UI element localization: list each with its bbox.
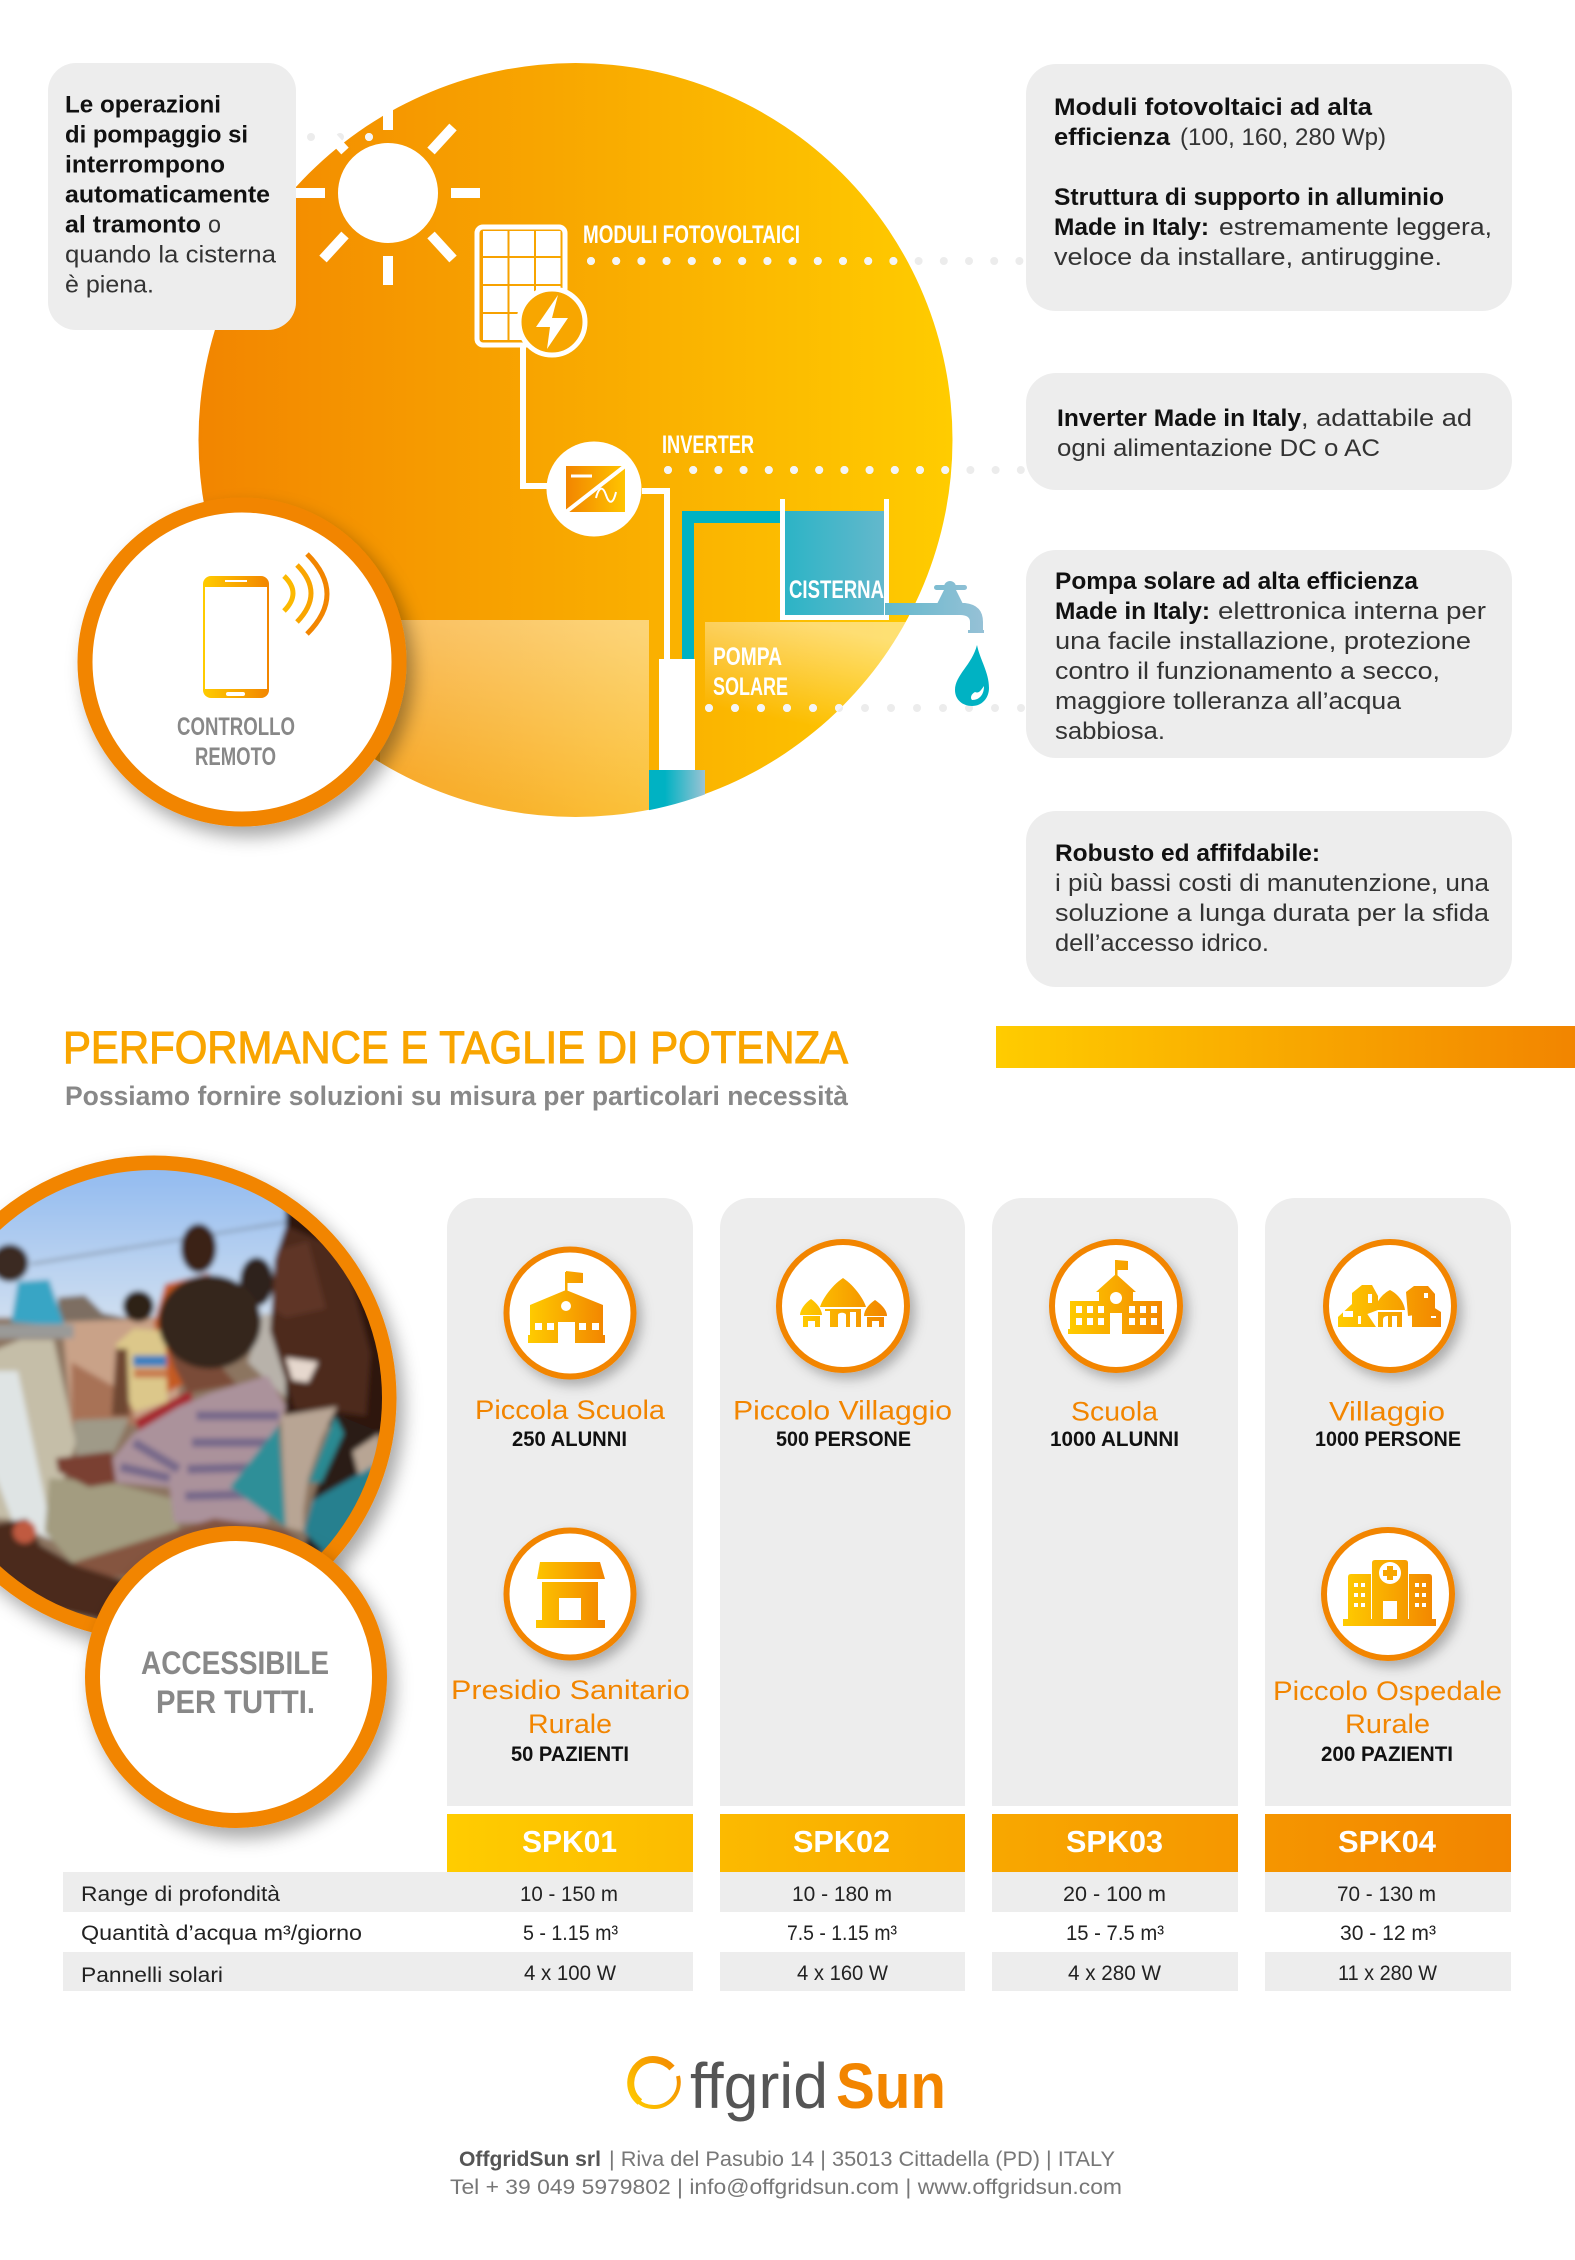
footer contact text: | Riva del Pasubio 14 | 35013 Cittadella (PD) | ITALY	[609, 2148, 1115, 2171]
remote control label: CONTROLLO	[177, 713, 295, 741]
specification table: 4 x 280 W	[1068, 1962, 1161, 1985]
diagram labels: MODULI FOTOVOLTAICI	[583, 221, 800, 249]
panel: pompa solare: elettronica interna per	[1218, 598, 1486, 625]
sun disc background	[198, 63, 952, 817]
remote control label: REMOTO	[195, 743, 276, 771]
panel: moduli fotovoltaici: Made in Italy:	[1054, 214, 1209, 241]
panel: pompa solare: maggiore tolleranza all’acqua	[1055, 688, 1402, 715]
specification table: 30 - 12 m³	[1340, 1922, 1436, 1945]
diagram labels: CISTERNA	[789, 576, 884, 604]
specification table: Pannelli solari	[81, 1964, 223, 1987]
label: piccolo villaggio: 500 PERSONE	[776, 1428, 911, 1451]
label: presidio sanitario: Rurale	[528, 1709, 612, 1739]
panel: moduli fotovoltaici: veloce da installare, antiruggine.	[1054, 244, 1442, 271]
callout: stop operations: o	[208, 212, 221, 238]
icon: solar panel	[477, 227, 585, 355]
callout: stop operations: al tramonto	[65, 212, 201, 238]
footer contact text: Tel + 39 049 5979802 | info@offgridsun.com | www.offgridsun.com	[450, 2176, 1122, 2199]
icon: inverter	[546, 442, 642, 536]
specification table: 4 x 160 W	[797, 1962, 888, 1985]
panel: moduli fotovoltaici: Moduli fotovoltaici ad alta	[1054, 94, 1373, 121]
panel: moduli fotovoltaici: Struttura di supporto in alluminio	[1054, 184, 1444, 211]
specification table: 4 x 100 W	[524, 1962, 616, 1985]
diagram labels: INVERTER	[662, 431, 754, 459]
callout circle: accessibile per tutti	[92, 1534, 380, 1820]
panel: robusto	[1026, 811, 1512, 987]
panel: robusto: dell’accesso idrico.	[1055, 930, 1269, 957]
logo: Sun	[836, 2050, 946, 2122]
panel: pompa solare: Made in Italy:	[1055, 598, 1210, 625]
callout: stop operations: automaticamente	[65, 182, 270, 208]
label: presidio sanitario: Presidio Sanitario	[451, 1675, 690, 1705]
panel: pompa solare: sabbiosa.	[1055, 718, 1165, 745]
column 4: SPK04	[1265, 1198, 1511, 1806]
specification table: Quantità d’acqua m³/giorno	[81, 1922, 362, 1945]
panel: moduli fotovoltaici: efficienza	[1054, 124, 1171, 151]
dotted leader: grey outside circle	[311, 137, 1024, 708]
callout circle: accessibile per tutti: ACCESSIBILE	[141, 1645, 329, 1681]
panel: moduli fotovoltaici	[1026, 64, 1512, 311]
model header bars: SPK02	[793, 1824, 890, 1859]
icon: health post	[506, 1530, 634, 1658]
specification table: 20 - 100 m	[1063, 1883, 1166, 1906]
panel: inverter	[1026, 373, 1512, 490]
label: villaggio	[1315, 1396, 1461, 1451]
panel: pompa solare: Pompa solare ad alta efficienza	[1055, 568, 1419, 595]
label: piccolo ospedale: 200 PAZIENTI	[1321, 1743, 1453, 1766]
icon: school	[1052, 1242, 1180, 1370]
label: piccolo villaggio	[733, 1396, 952, 1451]
label: scuola: 1000 ALUNNI	[1050, 1428, 1179, 1451]
label: piccolo ospedale: Piccolo Ospedale	[1273, 1676, 1502, 1706]
callout: stop operations: è piena.	[65, 272, 154, 298]
column 1: SPK01	[447, 1198, 693, 1806]
remote control label	[177, 713, 295, 771]
label: piccolo ospedale	[1273, 1676, 1502, 1766]
label: villaggio: 1000 PERSONE	[1315, 1428, 1461, 1451]
soil layers	[380, 620, 906, 817]
footer contact text	[450, 2148, 1122, 2199]
diagram labels: POMPA	[713, 643, 782, 671]
icon: water drop	[955, 645, 989, 706]
heading	[63, 1022, 849, 1111]
callout circle: accessibile per tutti: PER TUTTI.	[156, 1684, 315, 1720]
label: presidio sanitario	[451, 1675, 690, 1766]
icon: small school	[506, 1250, 634, 1376]
icon: sun	[296, 101, 480, 285]
callout: stop operations: interrompono	[65, 152, 225, 178]
panel: pompa solare	[1026, 550, 1512, 758]
label: villaggio: Villaggio	[1329, 1396, 1445, 1426]
panel: robusto: Robusto ed affifdabile:	[1055, 840, 1320, 867]
specification table: 15 - 7.5 m³	[1066, 1922, 1164, 1945]
specification table: 5 - 1.15 m³	[523, 1922, 618, 1945]
model header bars: SPK04	[1338, 1824, 1437, 1859]
specification table: 11 x 280 W	[1338, 1962, 1437, 1985]
panel: moduli fotovoltaici: estremamente leggera,	[1219, 214, 1492, 241]
label: scuola	[1050, 1396, 1179, 1451]
panel: moduli fotovoltaici: (100, 160, 280 Wp)	[1180, 124, 1386, 151]
heading accent bar	[996, 1026, 1575, 1068]
panel: pompa solare: una facile installazione, protezione	[1055, 628, 1471, 655]
label: presidio sanitario: 50 PAZIENTI	[511, 1743, 629, 1766]
panel: pompa solare: contro il funzionamento a secco,	[1055, 658, 1440, 685]
heading: PERFORMANCE E TAGLIE DI POTENZA	[63, 1022, 848, 1073]
panel: inverter: ogni alimentazione DC o AC	[1057, 435, 1380, 462]
icon: smartphone	[203, 576, 269, 698]
icon: village	[1326, 1242, 1454, 1370]
panel: inverter: Inverter Made in Italy	[1057, 405, 1302, 432]
icon: faucet	[885, 581, 984, 633]
wires	[523, 347, 667, 660]
label: piccola scuola	[475, 1395, 666, 1451]
logo	[631, 2050, 946, 2122]
specification table: 10 - 150 m	[520, 1883, 618, 1906]
logo: ffgrid	[690, 2050, 828, 2122]
label: piccolo villaggio: Piccolo Villaggio	[733, 1396, 952, 1426]
pump and cistern	[649, 499, 889, 830]
panel: robusto: soluzione a lunga durata per la sfida	[1055, 900, 1490, 927]
model header bars: SPK03	[1066, 1824, 1163, 1859]
specification table: 7.5 - 1.15 m³	[787, 1922, 897, 1945]
model header bars	[447, 1814, 1511, 1872]
specification table: Range di profondità	[81, 1883, 280, 1906]
callout: stop operations: quando la cisterna	[65, 242, 277, 268]
diagram labels: SOLARE	[713, 673, 788, 701]
specification table: 70 - 130 m	[1337, 1883, 1436, 1906]
footer contact text: OffgridSun srl	[459, 2148, 601, 2171]
diagram labels	[583, 221, 884, 701]
label: scuola: Scuola	[1071, 1396, 1159, 1426]
remote control circle	[85, 505, 399, 819]
panel: robusto: i più bassi costi di manutenzione, una	[1055, 870, 1490, 897]
callout: stop operations: di pompaggio si	[65, 122, 248, 148]
panel: inverter: , adattabile ad	[1301, 405, 1472, 432]
model header bars: SPK01	[522, 1824, 617, 1859]
label: piccola scuola: 250 ALUNNI	[512, 1428, 627, 1451]
label: piccola scuola: Piccola Scuola	[475, 1395, 666, 1425]
dotted leader: white inside circle	[365, 133, 950, 712]
specification table	[63, 1872, 1511, 1991]
label: piccolo ospedale: Rurale	[1345, 1709, 1430, 1739]
callout: stop operations: Le operazioni	[65, 92, 221, 118]
icon: signal waves	[284, 554, 327, 634]
icon: small village	[779, 1242, 907, 1370]
heading: Possiamo fornire soluzioni su misura per particolari necessità	[65, 1081, 849, 1111]
icon: hospital	[1324, 1530, 1452, 1658]
column 3: SPK03	[992, 1198, 1238, 1806]
callout: stop operations	[48, 63, 296, 330]
column 2: SPK02	[720, 1198, 965, 1806]
photo circle	[0, 1157, 402, 1633]
specification table: 10 - 180 m	[792, 1883, 892, 1906]
